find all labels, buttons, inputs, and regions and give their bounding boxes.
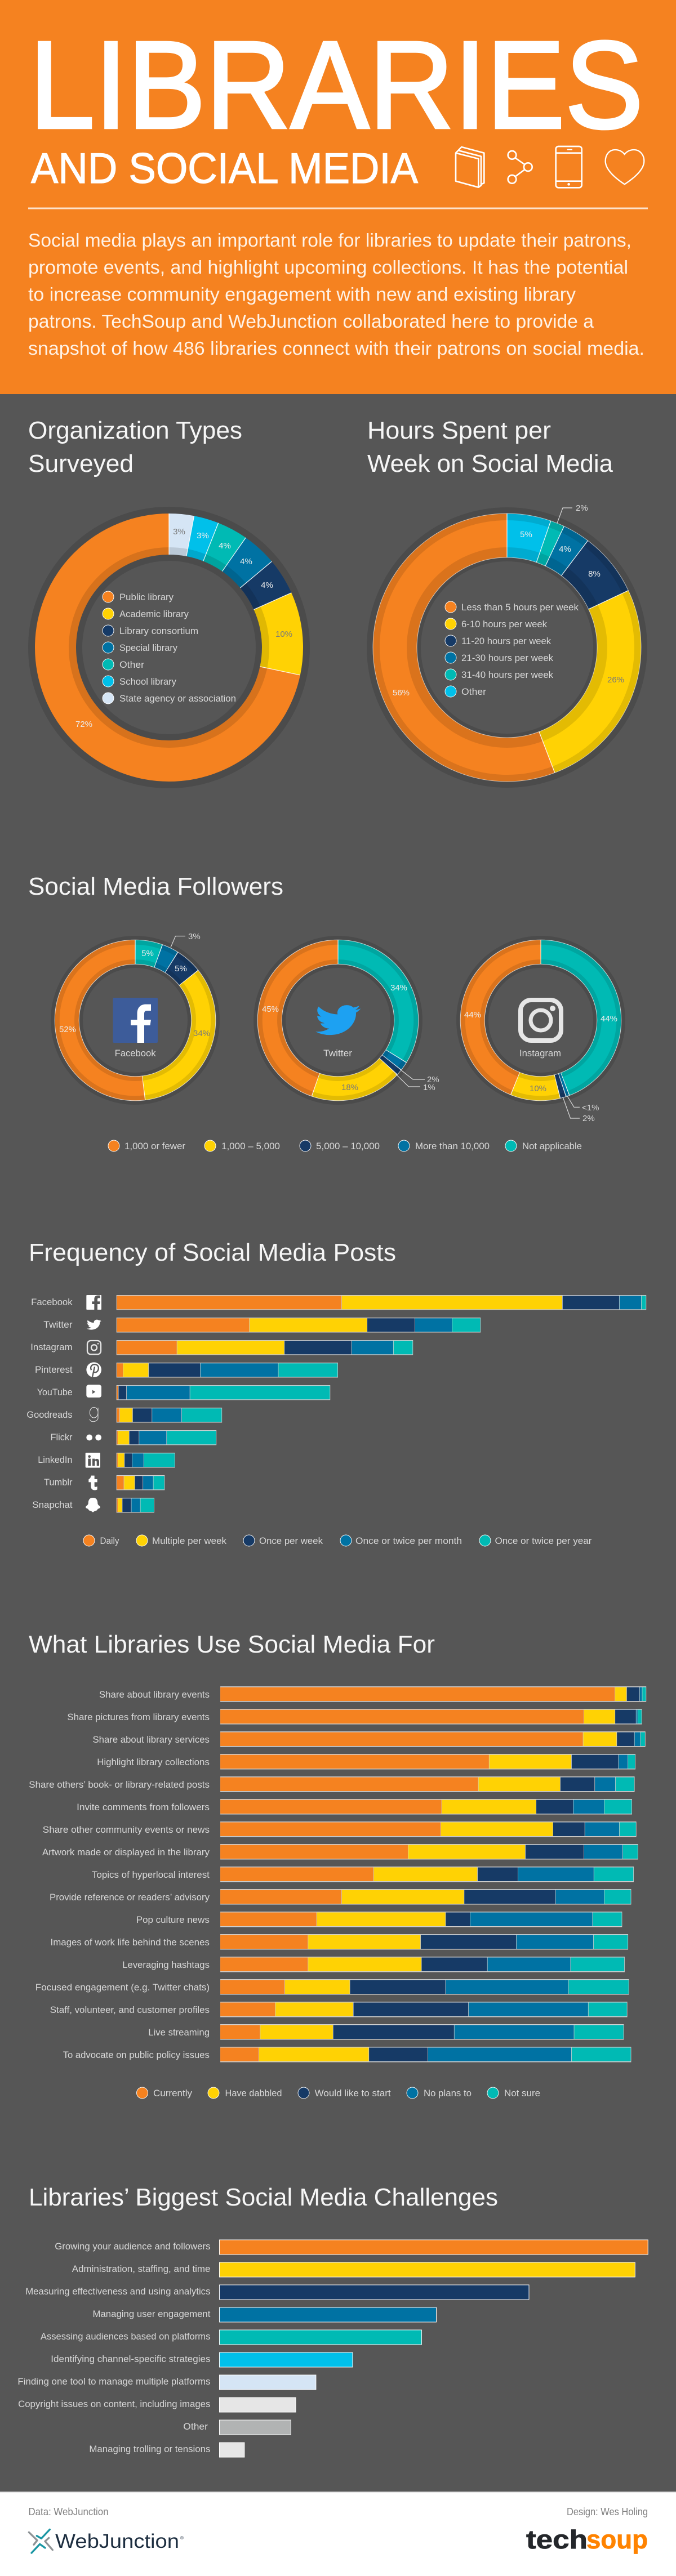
logo: TechSoup: tech: [526, 2525, 588, 2554]
intro paragraph: promote events, and highlight upcoming collections. It has the potential: [28, 257, 628, 278]
use labels: Live streaming: [148, 2027, 210, 2038]
donut chart: organization types: [55, 534, 283, 761]
legend: organization types: Other: [119, 659, 144, 670]
label: Twitter: Twitter: [323, 1048, 352, 1059]
Instagram percent labels: [464, 1010, 617, 1093]
challenge labels: Assessing audiences based on platforms: [41, 2331, 210, 2342]
use labels: Share about library services: [92, 1734, 210, 1745]
challenge labels: Managing trolling or tensions: [89, 2444, 210, 2454]
legend: hours spent: 31-40 hours per week: [461, 669, 553, 680]
icon: Flickr: [86, 1435, 101, 1440]
donut percent labels: 3%: [197, 531, 209, 541]
heading: organization types: Surveyed: [28, 450, 134, 477]
panel: hours spent per week: [367, 417, 641, 782]
icon: heart: [606, 150, 644, 184]
heading: organization types: Organization Types: [28, 417, 242, 444]
bar: Tumblr: [117, 1475, 164, 1490]
heading: hours spent: Hours Spent per: [367, 417, 551, 444]
legend: uses: No plans to: [424, 2088, 472, 2099]
use labels: Topics of hyperlocal interest: [92, 1869, 210, 1880]
callout: Twitter 2 percent: [400, 1069, 439, 1084]
legend: organization types: Library consortium: [119, 626, 198, 636]
use labels: Share about library events: [99, 1689, 210, 1700]
intro paragraph: snapshot of how 486 libraries connect with their patrons on social media.: [28, 338, 644, 359]
label: Instagram: Instagram: [519, 1048, 561, 1059]
logo: TechSoup: [526, 2525, 648, 2554]
bar: highlight collections: [220, 1754, 635, 1769]
use labels: Images of work life behind the scenes: [51, 1937, 210, 1948]
bar: LinkedIn: [117, 1453, 175, 1467]
bar: YouTube: [117, 1385, 330, 1400]
donut percent labels: 3%: [173, 527, 185, 537]
legend: followers: More than 10,000: [415, 1141, 490, 1151]
donut percent labels: 26%: [607, 675, 624, 685]
use labels: To advocate on public policy issues: [63, 2050, 210, 2060]
challenge labels: Copyright issues on content, including images: [18, 2399, 210, 2409]
Facebook percent labels: 52%: [59, 1025, 76, 1034]
bar: staff profiles: [220, 2002, 628, 2017]
icon: share: [508, 151, 532, 184]
legend: frequency: Multiple per week: [152, 1535, 226, 1546]
challenge labels: Other: [183, 2421, 208, 2432]
use labels: Share pictures from library events: [67, 1712, 210, 1722]
platform labels: [26, 1297, 73, 1510]
challenge labels: Finding one tool to manage multiple platforms: [17, 2376, 211, 2387]
legend: hours spent: Less than 5 hours per week: [461, 602, 579, 613]
legend: frequency: Once or twice per month: [355, 1535, 462, 1546]
icon: Instagram: [87, 1341, 101, 1354]
Instagram percent labels: 10%: [530, 1084, 546, 1093]
icon: Twitter bird: [315, 1005, 361, 1035]
bar: Twitter: [117, 1318, 481, 1332]
bar: focused engagement: [220, 1979, 629, 1994]
icon: Goodreads: [90, 1407, 98, 1422]
platform labels: Facebook: [31, 1297, 73, 1307]
legend: uses: Have dabbled: [225, 2088, 282, 2099]
challenge labels: Measuring effectiveness and using analytics: [25, 2286, 210, 2297]
bar: share pictures: [220, 1709, 642, 1724]
donut percent labels: 4%: [559, 544, 571, 554]
Twitter percent labels: 34%: [390, 983, 407, 993]
use labels: Share others’ book- or library-related posts: [29, 1779, 210, 1790]
legend: followers: [108, 1140, 582, 1151]
stacked bar chart: frequency: [117, 1295, 646, 1512]
use labels: Highlight library collections: [97, 1757, 210, 1767]
challenge labels: Identifying channel-specific strategies: [51, 2354, 211, 2364]
callout: Instagram under 1 percent: <1%: [582, 1103, 599, 1113]
icon: Tumblr: [88, 1476, 97, 1490]
legend: hours spent: 6-10 hours per week: [461, 619, 547, 630]
platform icons: [86, 1295, 101, 1512]
Facebook percent labels: 5%: [175, 964, 187, 974]
legend: frequency: [83, 1535, 592, 1546]
icon: smartphone: [556, 146, 582, 187]
panel: what libraries use social media for: [29, 1631, 646, 2099]
callout: Facebook 3 percent: [171, 932, 201, 947]
callout: Twitter 2 percent: 2%: [427, 1075, 439, 1084]
icon: YouTube: [86, 1385, 101, 1398]
stacked bar chart: uses: [220, 1686, 646, 2062]
platform labels: Instagram: [30, 1342, 72, 1352]
platform labels: Pinterest: [35, 1364, 73, 1375]
legend: organization types: Academic library: [119, 609, 189, 619]
challenge labels: Managing user engagement: [92, 2309, 211, 2319]
title: Libraries: LIBRARIES: [29, 15, 643, 154]
use labels: Provide reference or readers’ advisory: [50, 1892, 210, 1903]
challenge labels: Administration, staffing, and time: [72, 2264, 211, 2274]
bar: Pinterest: [117, 1363, 338, 1377]
platform labels: LinkedIn: [38, 1454, 72, 1465]
Instagram percent labels: 44%: [464, 1010, 481, 1020]
donut percent labels: 4%: [240, 557, 252, 566]
Twitter percent labels: [262, 983, 407, 1092]
bar: share about library events: [220, 1686, 646, 1702]
donut percent labels: 4%: [219, 541, 231, 551]
panel: frequency of posts: [26, 1239, 646, 1546]
Twitter percent labels: 45%: [262, 1004, 279, 1014]
panel: social media followers: [28, 873, 621, 1151]
intro paragraph: patrons. TechSoup and WebJunction collaborated here to provide a: [28, 311, 594, 332]
platform labels: Goodreads: [26, 1409, 72, 1420]
panel: organization types surveyed: [28, 417, 292, 761]
platform labels: Tumblr: [44, 1477, 73, 1488]
subtitle: and social media: AND SOCIAL MEDIA: [31, 145, 418, 193]
logo: WebJunction: ®: [180, 2535, 184, 2541]
logo: TechSoup: soup: [586, 2525, 648, 2554]
legend: frequency: Once per week: [259, 1535, 323, 1546]
bar: advocate: [220, 2047, 631, 2062]
donut percent labels: 8%: [588, 569, 601, 579]
legend: followers: 1,000 – 5,000: [221, 1141, 280, 1151]
icon: Snapchat: [86, 1498, 100, 1512]
bar chart: challenges: [220, 2240, 648, 2457]
callout: 2 percent: [557, 503, 588, 523]
bar: Goodreads: [117, 1408, 222, 1422]
use labels: Staff, volunteer, and customer profiles: [50, 2004, 210, 2015]
donut: Instagram followers: [460, 940, 621, 1101]
legend: hours spent: Other: [461, 686, 486, 697]
legend: organization types: [103, 591, 236, 704]
callout: Instagram 2 percent: [563, 1097, 595, 1123]
donut percent labels: 4%: [261, 581, 273, 590]
Facebook percent labels: 5%: [141, 949, 154, 958]
bar: hyperlocal: [220, 1867, 634, 1882]
use labels: Leveraging hashtags: [122, 1959, 210, 1970]
heading: frequency: Frequency of Social Media Posts: [29, 1239, 396, 1266]
platform labels: YouTube: [37, 1387, 73, 1398]
heading: organization types: [28, 417, 242, 477]
use labels: Artwork made or displayed in the library: [42, 1847, 210, 1858]
use labels: [29, 1689, 210, 2060]
donut: Facebook followers: [55, 940, 216, 1101]
callout: 2 percent: 2%: [576, 503, 588, 513]
use labels: Pop culture news: [136, 1914, 210, 1925]
legend: uses: Not sure: [504, 2088, 540, 2099]
donut percent labels: 5%: [520, 530, 532, 539]
icon: book: [456, 147, 484, 187]
donut percent labels: [75, 527, 292, 729]
legend: followers: 5,000 – 10,000: [316, 1141, 380, 1151]
heading: uses: What Libraries Use Social Media For: [29, 1631, 435, 1658]
bar: community events: [220, 1821, 637, 1837]
icon: Facebook logo: [113, 998, 158, 1043]
credit: data source: Data: WebJunction: [28, 2506, 108, 2517]
Instagram percent labels: 44%: [601, 1014, 617, 1024]
intro paragraph: Social media plays an important role for libraries to update their patrons,: [28, 230, 631, 251]
challenge labels: [17, 2241, 211, 2454]
legend: organization types: State agency or association: [119, 693, 236, 704]
challenge labels: Growing your audience and followers: [55, 2241, 210, 2252]
Facebook percent labels: [59, 949, 210, 1038]
intro paragraph: to increase community engagement with new and existing library: [28, 284, 576, 305]
bar: share services: [220, 1731, 646, 1747]
panel: orange header: [0, 0, 676, 394]
legend: hours spent: 11-20 hours per week: [461, 636, 551, 646]
legend: organization types: Special library: [119, 642, 177, 653]
label: Facebook: Facebook: [115, 1048, 156, 1059]
donut percent labels: 10%: [275, 630, 292, 639]
bar: share others posts: [220, 1776, 635, 1792]
donut percent labels: 72%: [75, 720, 92, 729]
legend: followers: Not applicable: [522, 1141, 582, 1151]
icon: Instagram logo: [521, 1000, 561, 1041]
Twitter percent labels: 18%: [341, 1083, 358, 1092]
bar: hashtags: [220, 1957, 625, 1972]
callout: Instagram 2 percent: 2%: [582, 1114, 595, 1123]
legend: organization types: School library: [119, 676, 176, 687]
panel: footer: [0, 2492, 676, 2576]
donut: Twitter followers: [257, 940, 419, 1101]
icon: Facebook: [86, 1295, 101, 1310]
icon: Pinterest: [86, 1362, 101, 1377]
use labels: Invite comments from followers: [77, 1802, 210, 1812]
legend: frequency: Once or twice per year: [495, 1535, 592, 1546]
icon: Twitter: [87, 1320, 101, 1330]
callout: Instagram under 1 percent: [567, 1095, 599, 1113]
bar: work life: [220, 1934, 628, 1949]
bar: Facebook: [117, 1295, 646, 1310]
logo: WebJunction: [29, 2529, 184, 2553]
heading: hours spent: Week on Social Media: [367, 450, 613, 477]
bar: pop culture: [220, 1912, 622, 1927]
bar: Instagram: [117, 1340, 413, 1355]
bar: artwork: [220, 1844, 638, 1859]
legend: uses: Currently: [153, 2088, 192, 2099]
heading: challenges: Libraries’ Biggest Social Media Challenges: [29, 2184, 498, 2211]
callout: Twitter 1 percent: 1%: [423, 1083, 435, 1092]
credit: designer: Design: Wes Holing: [567, 2506, 648, 2517]
donut percent labels: 56%: [393, 688, 410, 698]
legend: hours spent: [445, 601, 579, 697]
heading: followers: Social Media Followers: [28, 873, 283, 900]
donut chart: hours spent: [373, 514, 641, 782]
bar: reference: [220, 1889, 631, 1904]
bar: live streaming: [220, 2024, 624, 2039]
legend: hours spent: 21-30 hours per week: [461, 653, 553, 663]
use labels: Share other community events or news: [43, 1824, 210, 1835]
donut percent labels: [393, 530, 624, 698]
legend: uses: [136, 2087, 540, 2099]
legend: frequency: Daily: [100, 1535, 119, 1546]
use labels: Focused engagement (e.g. Twitter chats): [35, 1982, 210, 1993]
legend: uses: Would like to start: [315, 2088, 391, 2099]
intro paragraph: [28, 230, 644, 359]
bar: Flickr: [117, 1430, 216, 1445]
callout: Twitter 1 percent: [395, 1074, 435, 1092]
callout: Facebook 3 percent: 3%: [188, 932, 201, 941]
bar: invite comments: [220, 1799, 632, 1814]
legend: followers: 1,000 or fewer: [124, 1141, 185, 1151]
bar: Snapchat: [117, 1498, 154, 1512]
icon: LinkedIn: [86, 1453, 100, 1468]
panel: biggest challenges: [17, 2184, 648, 2457]
logo: WebJunction: WebJunction: [55, 2530, 179, 2552]
heading: hours spent: [367, 417, 613, 477]
platform labels: Snapchat: [32, 1499, 73, 1510]
platform labels: Flickr: [51, 1432, 73, 1443]
Facebook percent labels: 34%: [193, 1029, 210, 1038]
legend: organization types: Public library: [119, 592, 174, 602]
platform labels: Twitter: [43, 1319, 73, 1330]
